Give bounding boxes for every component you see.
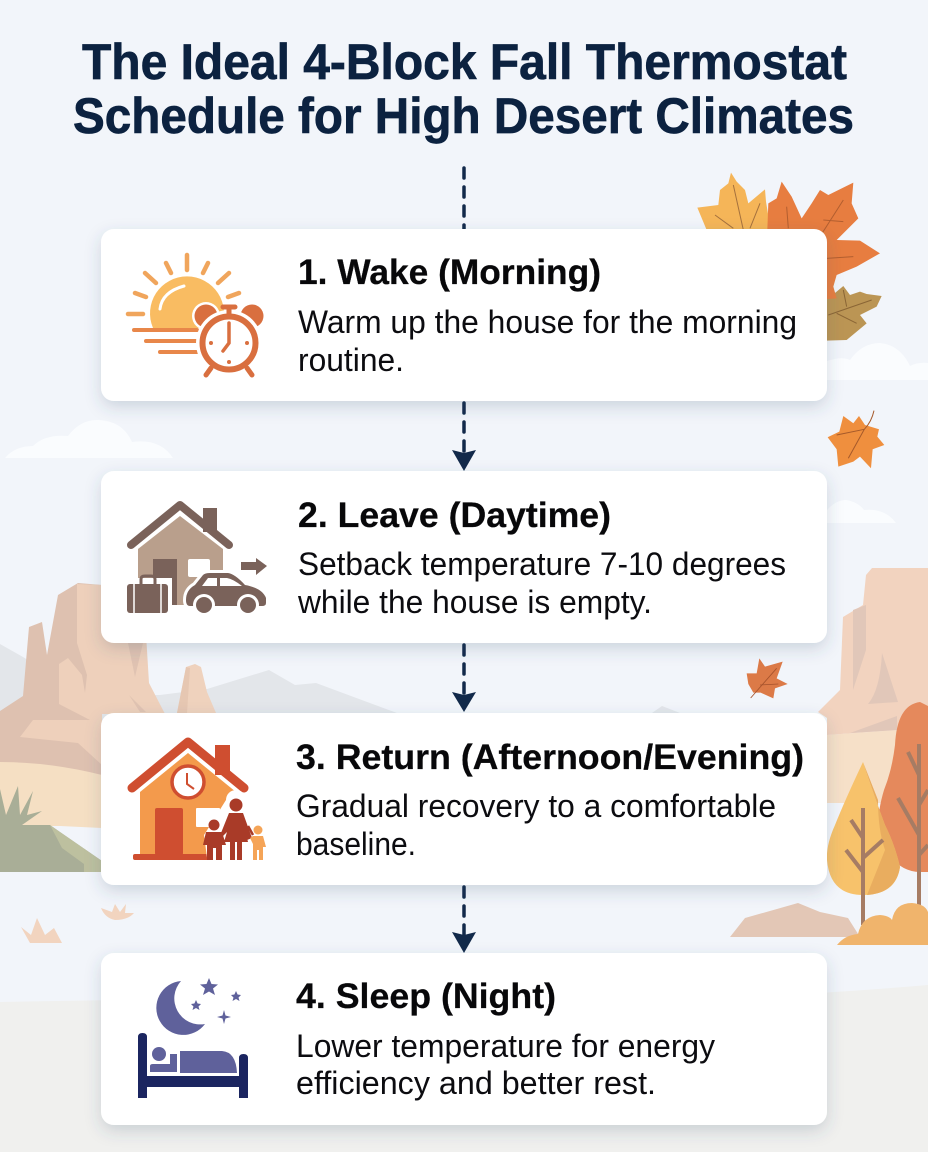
description: Setback temperature 7-10 degrees [298,546,786,582]
heading: 1. Wake (Morning) [298,253,601,292]
arrow: step 2 to 3 [452,645,476,712]
panel: step 4 sleep [101,953,827,1125]
leaf cluster [697,173,882,341]
title: Schedule for High Desert Climates [73,88,854,144]
icon: house, suitcase and car [124,505,267,616]
description: while the house is empty. [297,584,652,620]
heading: 4. Sleep (Night) [296,977,556,1016]
panel: step 2 leave [101,471,827,643]
right clouds [827,343,928,523]
arrow: step 3 to 4 [452,887,476,953]
description: efficiency and better rest. [296,1065,656,1101]
arrow: start connector [462,168,466,229]
left cloud [5,420,173,458]
icon: sun and alarm clock [128,255,264,376]
icon: house with clock and family [132,742,266,865]
description: routine. [298,342,404,378]
description: Lower temperature for energy [296,1028,715,1064]
small desert plants [21,904,134,943]
right desert landscape [730,568,928,937]
description [298,304,797,378]
description: Gradual recovery to a comfortable [296,788,776,824]
description: Warm up the house for the morning [298,304,797,340]
small maple leaf [747,658,788,698]
falling leaf [828,411,884,468]
title [73,34,854,144]
description: baseline. [296,826,416,862]
description [296,1028,715,1101]
panel: step 3 return [101,713,827,885]
arrow: step 1 to 2 [452,403,476,471]
heading: 2. Leave (Daytime) [298,496,611,535]
autumn trees [827,702,928,945]
description [297,546,786,620]
icon: moon, stars and bed [138,978,248,1098]
description [296,788,776,862]
heading: 3. Return (Afternoon/Evening) [296,738,804,777]
left desert landscape [0,583,680,872]
title: The Ideal 4-Block Fall Thermostat [82,34,847,90]
panel: step 1 wake [101,229,827,401]
